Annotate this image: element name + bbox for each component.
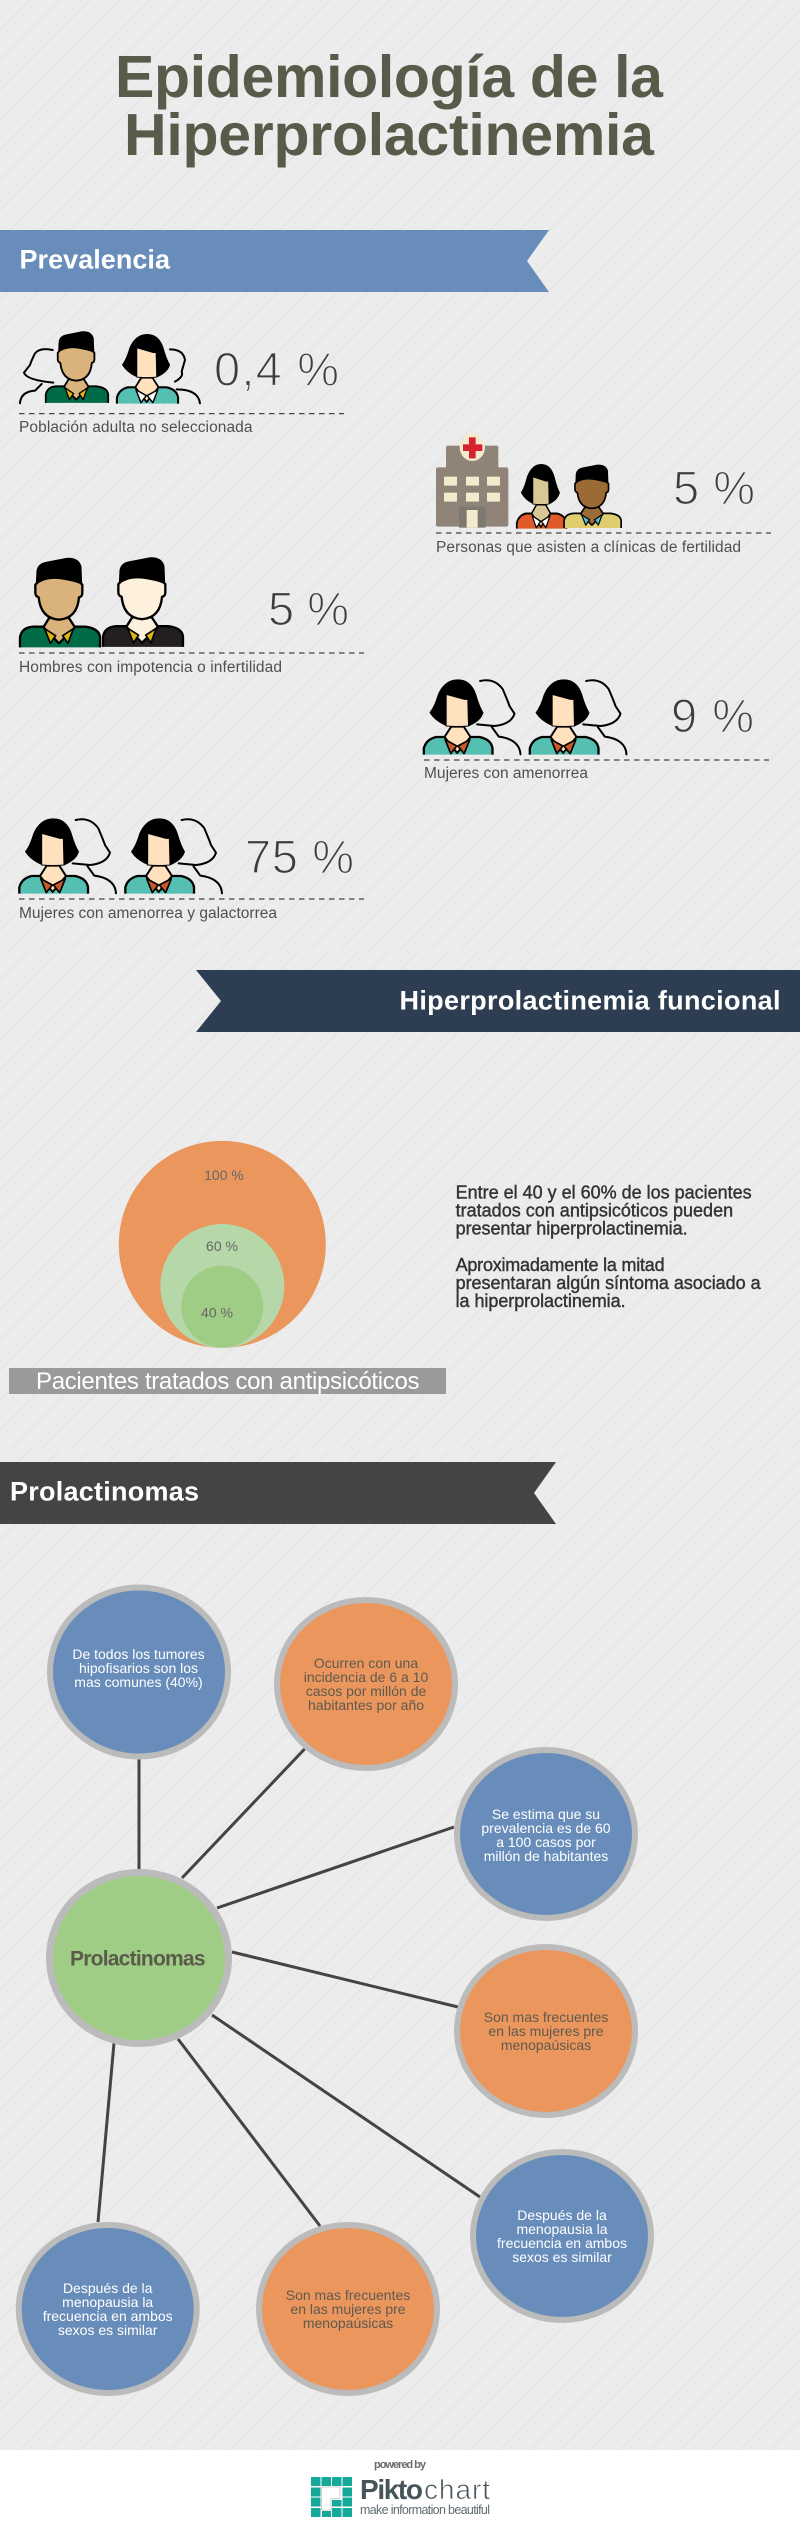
bubble: tumores: De todos los tumores — [72, 1646, 205, 1662]
icon: two women with silhouettes — [424, 679, 626, 755]
bubble: incidencia — [277, 1600, 455, 1768]
number: 5 % — [268, 582, 349, 635]
title — [115, 44, 664, 168]
label: Población adulta no seleccionada — [19, 419, 253, 436]
stat: clínicas de fertilidad 5 % — [436, 434, 771, 556]
nested circles chart: 40 % — [201, 1304, 233, 1320]
wordmark — [360, 2474, 490, 2517]
bubble: mujeres pre menopaúsicas bottom: menopaúsicas — [303, 2315, 393, 2331]
nested circles chart: 100 % — [204, 1167, 244, 1183]
number: 9 % — [671, 689, 754, 742]
icon: two women with silhouettes — [19, 818, 222, 894]
stat: amenorrea 9 % — [424, 679, 769, 782]
text block: antipsicóticos: tratados con antipsicóticos pueden — [456, 1201, 733, 1221]
bubble: después de la menopausia right: Después de la — [517, 2207, 607, 2223]
text block: antipsicóticos: presentar hiperprolactinemia. — [456, 1219, 688, 1239]
icon: man and woman with silhouettes — [20, 332, 200, 404]
bubble: después de la menopausia left: sexos es similar — [58, 2322, 158, 2338]
icon: two men — [20, 558, 183, 647]
bubble: mujeres pre menopaúsicas: en las mujeres pre — [488, 2023, 604, 2039]
bubble: Prolactinomas hub — [50, 1872, 228, 2044]
footer — [0, 2450, 800, 2530]
bubble: después de la menopausia right: menopausia la — [516, 2221, 608, 2237]
text block: antipsicóticos: Aproximadamente la mitad — [456, 1255, 665, 1275]
bubble: después de la menopausia right: frecuencia en ambos — [497, 2235, 627, 2251]
bubble: tumores: hipofisarios son los — [79, 1660, 198, 1676]
banner: Prolactinomas — [0, 1462, 556, 1524]
nested circles chart: 60 % — [206, 1238, 238, 1254]
banner: Hiperprolactinemia funcional — [196, 970, 800, 1032]
wordmark: Pikto — [360, 2474, 423, 2505]
wordmark: chart — [424, 2474, 490, 2505]
connector lines — [98, 1749, 480, 2226]
label: Hombres con impotencia o infertilidad — [19, 659, 282, 676]
nested circles chart — [119, 1141, 326, 1348]
banner: Prolactinomas: Prolactinomas — [10, 1477, 199, 1507]
icon: hospital — [436, 434, 508, 528]
icon: Piktochart logo — [311, 2477, 352, 2517]
label: Mujeres con amenorrea — [424, 765, 588, 782]
chart caption: Pacientes tratados con antipsicóticos — [36, 1368, 420, 1395]
bubble: mujeres pre menopaúsicas: Son mas frecuentes — [484, 2009, 608, 2025]
bubble: mujeres pre menopaúsicas: menopaúsicas — [501, 2037, 591, 2053]
bubble: mujeres pre menopaúsicas bottom — [259, 2225, 437, 2393]
wordmark: make information beautiful — [360, 2503, 490, 2517]
bubble: tumores — [50, 1588, 228, 1756]
bubble: Prolactinomas hub: Prolactinomas — [70, 1948, 206, 1970]
bubble: prevalencia: millón de habitantes — [484, 1848, 608, 1864]
text block: antipsicóticos — [456, 1183, 762, 1311]
title: Hiperprolactinemia — [124, 102, 655, 168]
label: Mujeres con amenorrea y galactorrea — [19, 905, 277, 922]
bubble: incidencia: Ocurren con una — [314, 1655, 418, 1671]
bubble: después de la menopausia right: sexos es similar — [512, 2249, 612, 2265]
banner: Prevalencia — [0, 230, 549, 292]
bubble: prevalencia: prevalencia es de 60 — [481, 1820, 611, 1836]
bubble: incidencia: habitantes por año — [308, 1697, 424, 1713]
text block: antipsicóticos: la hiperprolactinemia. — [456, 1291, 626, 1311]
bubble: incidencia: casos por millón de — [306, 1683, 427, 1699]
bubble: mujeres pre menopaúsicas — [457, 1947, 635, 2115]
stat: hombres 5 % — [19, 558, 364, 676]
bubble: después de la menopausia left — [19, 2225, 197, 2393]
bubble: después de la menopausia left: menopausia la — [62, 2294, 153, 2310]
bubble: después de la menopausia left: frecuencia en ambos — [43, 2308, 173, 2324]
label: Personas que asisten a clínicas de fertilidad — [436, 539, 741, 556]
bubble: prevalencia — [457, 1750, 635, 1918]
concept map — [19, 1588, 651, 2393]
powered by: powered by — [374, 2459, 427, 2471]
stat: amenorrea y galactorrea 75 % — [19, 818, 364, 922]
number: 0,4 % — [214, 342, 339, 396]
bubble: después de la menopausia left: Después de la — [63, 2280, 153, 2296]
bubble: después de la menopausia right — [473, 2152, 651, 2320]
text block: antipsicóticos: Entre el 40 y el 60% de los pacientes — [456, 1183, 752, 1203]
bubble: tumores: mas comunes (40%) — [74, 1674, 203, 1690]
bubble: prevalencia: Se estima que su — [492, 1806, 600, 1822]
title: Epidemiología de la — [115, 44, 664, 110]
text block: antipsicóticos: presentaran algún síntoma asociado a — [456, 1273, 762, 1293]
number: 5 % — [673, 461, 755, 514]
stat: población adulta 0,4 % — [19, 332, 344, 436]
bubble: prevalencia: a 100 casos por — [496, 1834, 596, 1850]
icon: couple — [517, 464, 621, 529]
bubble: incidencia: incidencia de 6 a 10 — [304, 1669, 428, 1685]
banner: Prevalencia: Prevalencia — [20, 244, 171, 274]
banner: Hiperprolactinemia funcional: Hiperprolactinemia funcional — [400, 986, 780, 1016]
bubble: mujeres pre menopaúsicas bottom: Son mas frecuentes — [286, 2287, 410, 2303]
number: 75 % — [245, 830, 354, 883]
bubble: mujeres pre menopaúsicas bottom: en las mujeres pre — [290, 2301, 406, 2317]
